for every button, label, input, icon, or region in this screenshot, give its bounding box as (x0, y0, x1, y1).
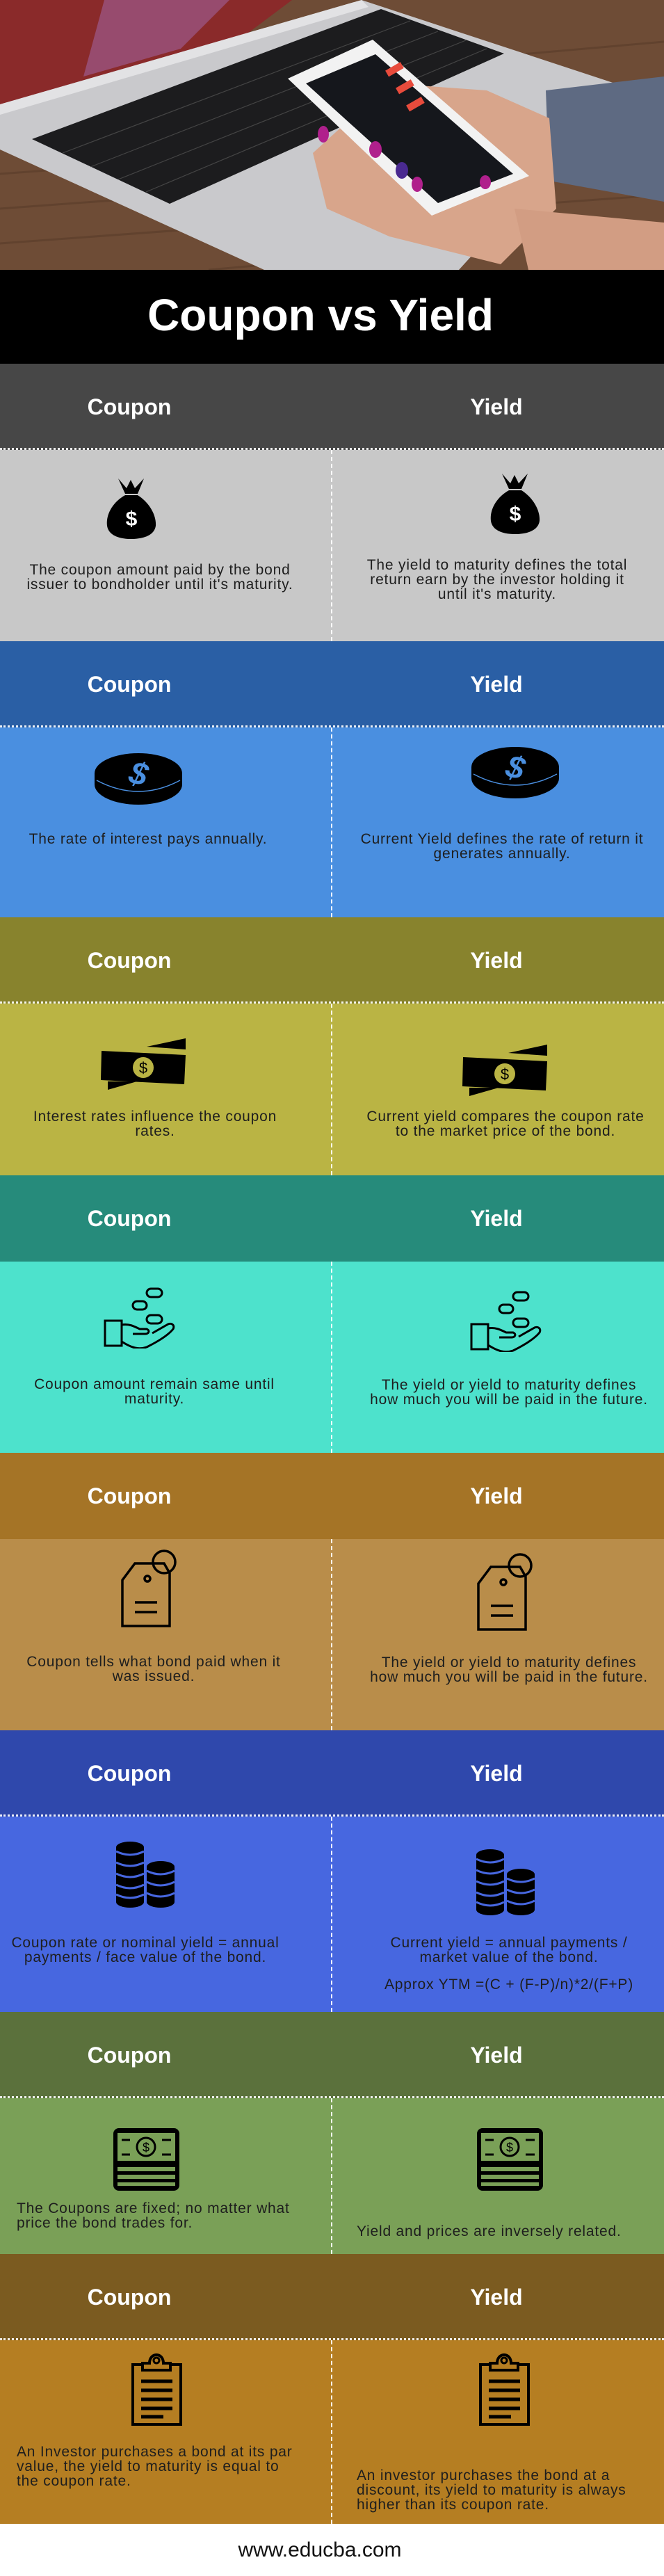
icon: money bag left (107, 478, 156, 539)
panel 8 (0, 2340, 664, 2524)
panel 1 (0, 450, 664, 641)
header row 4: Yield (470, 1206, 523, 1231)
panel 5 (0, 1539, 664, 1730)
text: yield 1: return earn by the investor holding it (370, 572, 624, 588)
header row 3: Yield (470, 948, 523, 973)
text: coupon 5: was issued. (113, 1668, 195, 1684)
text: yield 6: Current yield = annual payments / (391, 1935, 627, 1951)
icon: banknote right (462, 1045, 547, 1096)
header row 1: Coupon (88, 394, 171, 419)
text: YTM formula: Approx YTM =(C + (F-P)/n)*2/(F+P) (384, 1977, 633, 1993)
icon: coin stacks right (476, 1849, 535, 1915)
header row 6: Yield (470, 1761, 523, 1786)
icon: coin right (471, 747, 559, 798)
text: coupon 8 (17, 2444, 293, 2489)
text: yield 2: Current Yield defines the rate of return it (361, 831, 643, 847)
header row 3 (0, 917, 664, 1004)
header row 3: Coupon (88, 948, 171, 973)
text: coupon 1: The coupon amount paid by the bond (29, 562, 291, 578)
header row 4: Coupon (88, 1206, 171, 1231)
text: coupon 6: payments / face value of the bond. (24, 1949, 266, 1965)
text: coupon 7 (17, 2200, 290, 2231)
panel 2 (0, 727, 664, 917)
header row 6: Coupon (88, 1761, 171, 1786)
text: yield 1: The yield to maturity defines the total (367, 557, 627, 573)
icon: coin left (95, 753, 182, 805)
text: yield 8: discount, its yield to maturity is always (357, 2482, 626, 2498)
hero photo: laptop and phone (0, 0, 664, 270)
header row 6 (0, 1730, 664, 1817)
header row 2: Yield (470, 672, 523, 697)
footer url: www.educba.com (238, 2538, 402, 2561)
text: yield 2 (361, 831, 643, 862)
text: yield 3 (366, 1109, 645, 1139)
icon: coin left: $ (124, 753, 152, 794)
text: yield 4: how much you will be paid in the future. (370, 1392, 648, 1408)
panel 4 (0, 1262, 664, 1453)
header row 2 (0, 641, 664, 727)
icon: price tag left (121, 1549, 177, 1627)
text: yield 6: market value of the bond. (420, 1949, 598, 1965)
text: yield 4: The yield or yield to maturity defines (382, 1377, 636, 1393)
header row 5: Coupon (88, 1483, 171, 1508)
text: yield 6 (391, 1935, 627, 1965)
header row 7: Coupon (88, 2043, 171, 2068)
icon: money bag right (491, 474, 540, 534)
panel 3 (0, 1004, 664, 1175)
text: coupon 1: issuer to bondholder until it's maturity. (26, 577, 293, 593)
icon: cash stack right (477, 2128, 543, 2191)
icon: hand with coins right (470, 1291, 541, 1352)
icon: coin right: $ (501, 747, 529, 787)
header row 8: Yield (470, 2285, 523, 2310)
header row 5 (0, 1453, 664, 1539)
panel 6 (0, 1817, 664, 2012)
icon: banknote right: $ (501, 1065, 509, 1083)
header row 5: Yield (470, 1483, 523, 1508)
icon: hand with coins left (104, 1288, 175, 1349)
text: yield 8: An investor purchases the bond at a (357, 2468, 610, 2484)
text: coupon 2: The rate of interest pays annually. (29, 831, 267, 847)
header row 7 (0, 2012, 664, 2098)
text: coupon 4: maturity. (124, 1391, 184, 1407)
header row 7: Yield (470, 2043, 523, 2068)
icon: money bag right: $ (510, 503, 521, 526)
text: yield 5: The yield or yield to maturity defines (382, 1655, 636, 1671)
text: yield 4 (370, 1377, 648, 1408)
text: yield 1 (367, 557, 627, 602)
header row 4 (0, 1175, 664, 1262)
text: coupon 3: Interest rates influence the coupon (33, 1109, 277, 1125)
text: coupon 4: Coupon amount remain same until (34, 1376, 275, 1392)
icon: cash stack left (113, 2128, 179, 2191)
text: coupon 8: An Investor purchases a bond at its par (17, 2444, 293, 2460)
text: yield 5: how much you will be paid in the future. (370, 1669, 648, 1685)
header row 1 (0, 364, 664, 450)
icon: cash stack right: $ (506, 2141, 513, 2155)
text: yield 8 (357, 2468, 626, 2513)
header row 8: Coupon (88, 2285, 171, 2310)
header row 8 (0, 2254, 664, 2340)
text: yield 7: Yield and prices are inversely related. (357, 2223, 622, 2239)
text: coupon 7: price the bond trades for. (17, 2215, 193, 2231)
header row 2: Coupon (88, 672, 171, 697)
text: yield 3: Current yield compares the coupon rate (366, 1109, 645, 1125)
icon: price tag right (477, 1553, 533, 1631)
text: yield 2: generates annually. (434, 846, 570, 862)
text: coupon 1 (26, 562, 293, 593)
text: coupon 6: Coupon rate or nominal yield = annual (11, 1935, 280, 1951)
icon: cash stack left: $ (143, 2141, 149, 2155)
icon: clipboard right (479, 2353, 530, 2426)
text: coupon 6 (11, 1935, 280, 1965)
text: coupon 8: value, the yield to maturity is equal to (17, 2458, 280, 2474)
title bar (0, 270, 664, 364)
text: coupon 8: the coupon rate. (17, 2473, 131, 2489)
text: coupon 3: rates. (135, 1123, 175, 1139)
icon: banknote left (101, 1038, 186, 1090)
icon: clipboard left (131, 2353, 182, 2426)
text: coupon 4 (34, 1376, 275, 1407)
panel 7 (0, 2098, 664, 2254)
text: coupon 5 (26, 1654, 281, 1684)
text: yield 3: to the market price of the bond. (396, 1123, 615, 1139)
text: yield 1: until it's maturity. (438, 586, 556, 602)
icon: coin stacks left (116, 1842, 175, 1908)
text: coupon 7: The Coupons are fixed; no matter what (17, 2200, 290, 2216)
icon: banknote left: $ (139, 1059, 147, 1077)
text: coupon 5: Coupon tells what bond paid when it (26, 1654, 281, 1670)
text: yield 8: higher than its coupon rate. (357, 2497, 549, 2513)
icon: money bag left: $ (126, 508, 138, 531)
title: Coupon vs Yield (147, 290, 494, 340)
text: yield 5 (370, 1655, 648, 1685)
header row 1: Yield (470, 394, 523, 419)
text: coupon 3 (33, 1109, 277, 1139)
